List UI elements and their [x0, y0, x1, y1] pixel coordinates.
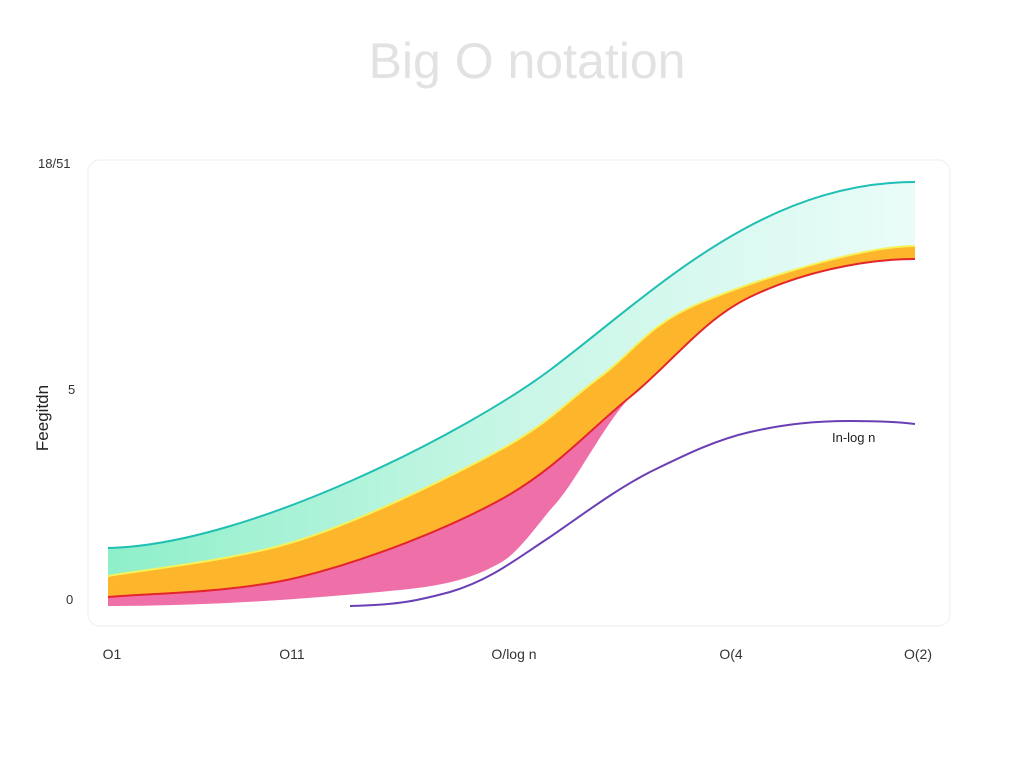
y axis labels: 18/51	[38, 156, 71, 171]
line: purple n log n	[350, 421, 915, 606]
line: teal	[108, 182, 915, 548]
line: red	[108, 259, 915, 597]
x axis labels	[103, 646, 932, 662]
x axis labels: O11	[279, 646, 305, 662]
x axis labels: O/log n	[491, 646, 537, 662]
y axis labels: 5	[68, 382, 75, 397]
area: teal band	[108, 182, 915, 576]
area: pink band	[108, 397, 630, 606]
y axis labels: 0	[66, 592, 73, 607]
y axis title: Feegitdn	[33, 385, 52, 451]
x axis labels: O(2)	[904, 646, 932, 662]
y axis labels	[38, 156, 75, 607]
x axis labels: O(4	[719, 646, 743, 662]
label: In-log n: In-log n	[832, 430, 875, 445]
area: orange band	[108, 246, 915, 597]
x axis labels: O1	[103, 646, 122, 662]
chart frame	[88, 160, 950, 626]
line: yellow	[108, 246, 915, 576]
title: Big O notation	[369, 33, 685, 89]
